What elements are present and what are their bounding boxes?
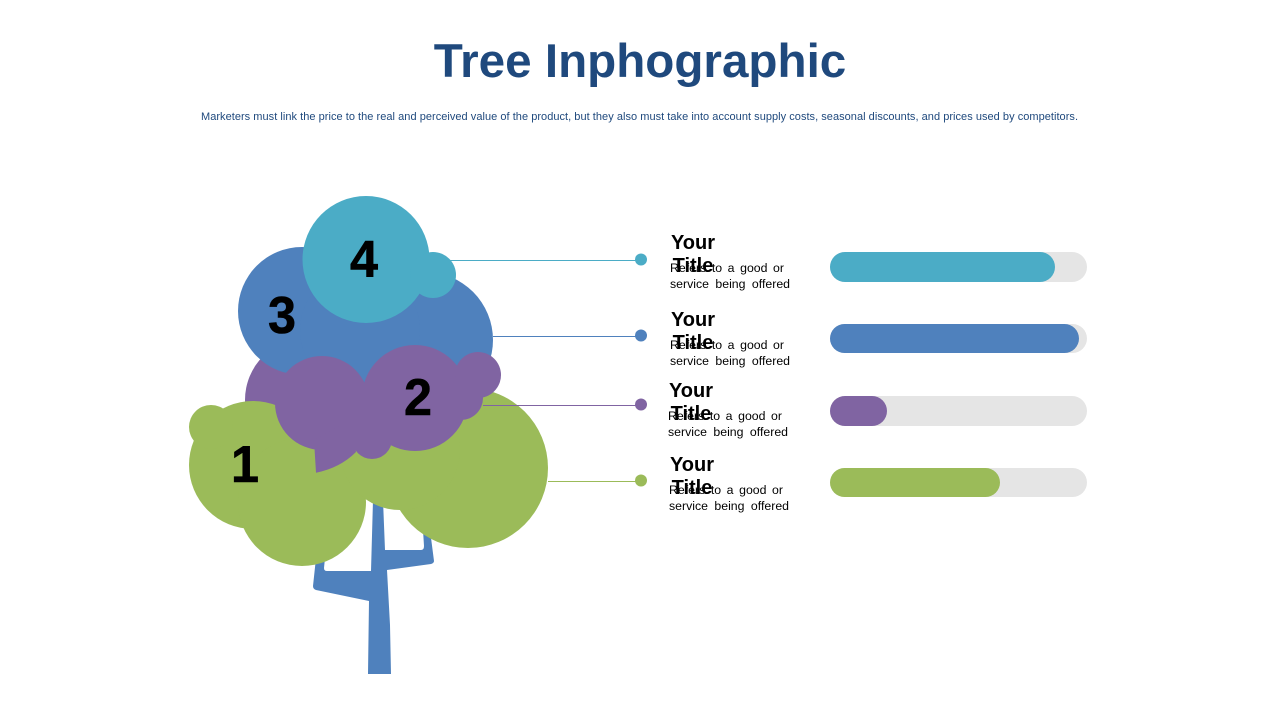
item 3 text: service being offered [670,354,790,368]
item 2 title: Your Title [669,380,713,425]
item 3 text [670,338,790,368]
item 1 bar [830,468,1087,497]
item 2 text: Refers to a good or [668,409,782,423]
item 4 text [670,261,790,291]
item 1 text [669,483,789,513]
item 1 title: Your Title [670,454,714,499]
purple canopy 2 [275,345,501,473]
green canopy 1 [189,388,548,566]
purple connector line [483,404,641,406]
blue canopy 3 [238,247,493,408]
trunk [313,500,434,674]
dot green [635,474,647,486]
item 2 text: service being offered [668,425,788,439]
item 3 bar [830,324,1087,353]
item 3 title: Your Title [671,309,715,354]
item 1 text: service being offered [669,499,789,513]
item 1 text: Refers to a good or [669,483,783,497]
subtitle: Marketers must link the price to the real and perceived value of the product, but they also must take into account supply costs, seasonal discounts, and prices used by competitors. [201,111,1078,123]
number 4: 4 [350,231,378,289]
title: Tree Inphographic [434,35,846,88]
teal canopy 4 [302,196,456,323]
number 1: 1 [231,436,259,494]
item 4 title: Your Title [671,232,715,277]
item 4 bar [830,252,1087,282]
dot purple [635,398,647,410]
item 3 text: Refers to a good or [670,338,784,352]
number 2: 2 [404,369,432,427]
connector lines [450,260,641,482]
item 2 bar [830,396,1087,426]
item 4 text: service being offered [670,277,790,291]
back purple lobe [245,338,369,462]
dot teal [635,254,647,266]
item 4 text: Refers to a good or [670,261,784,275]
item 2 text [668,409,788,439]
dot blue [635,330,647,342]
number 3: 3 [268,287,296,345]
